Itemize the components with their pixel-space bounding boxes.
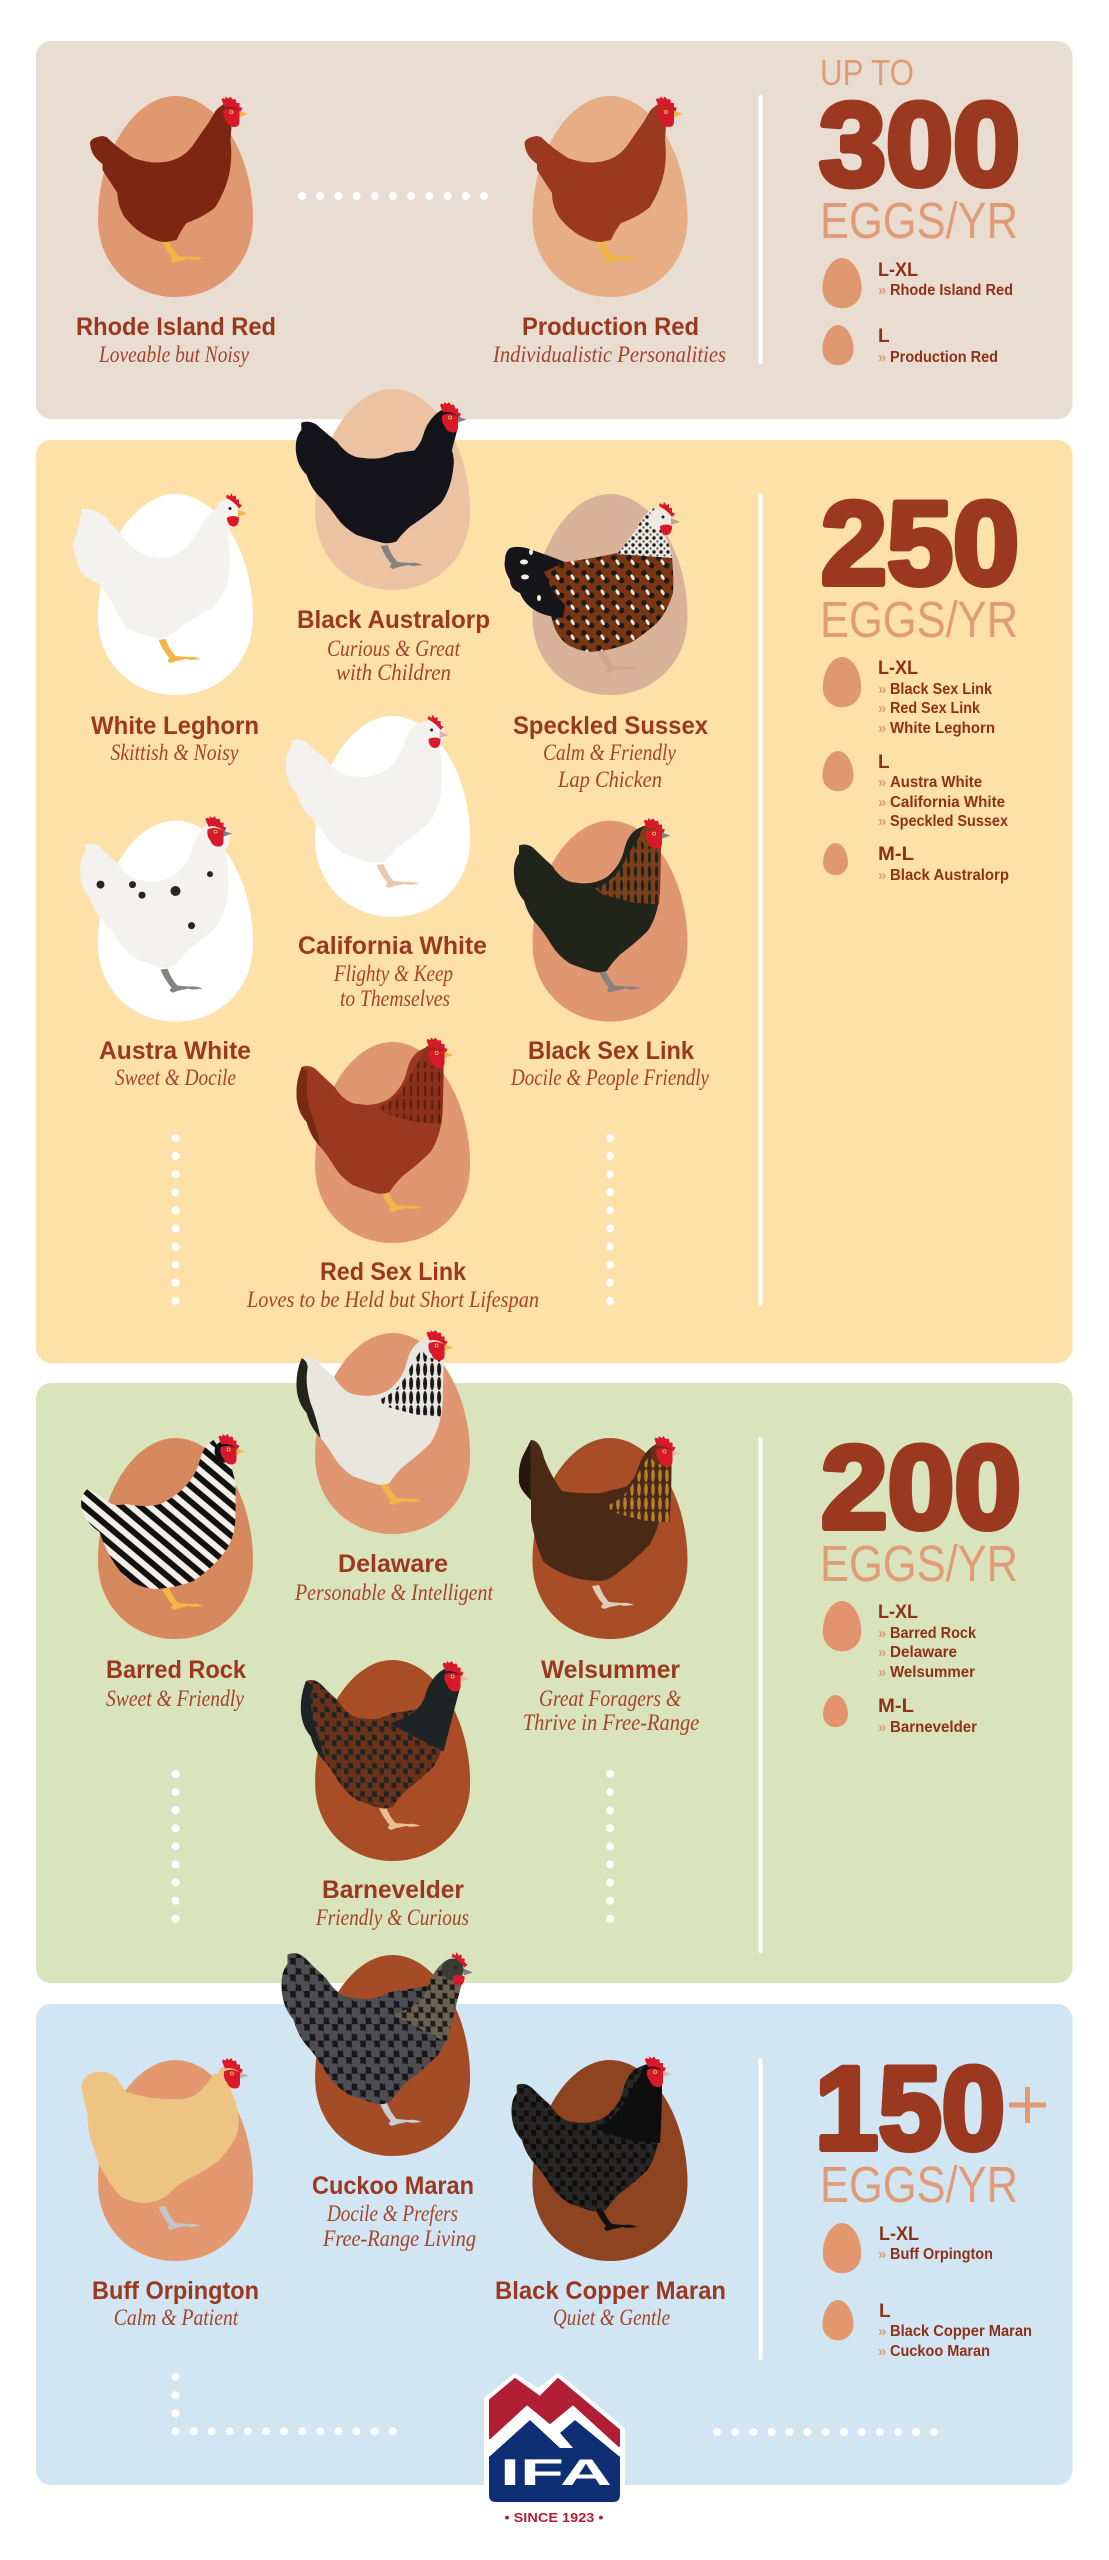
logo: IFA since 1923: • SINCE 1923 • <box>504 2510 604 2525</box>
panel: 250 eggs per year <box>36 389 1072 1363</box>
legend: egg sizes: » <box>878 349 886 366</box>
trait <box>543 740 677 792</box>
trait <box>523 1686 699 1735</box>
trait: Individualistic Personalities <box>492 342 726 367</box>
trait: Calm & Patient <box>114 2305 239 2330</box>
legend: egg sizes: » <box>878 1625 886 1642</box>
trait: Sweet & Docile <box>115 1065 236 1090</box>
trait: Friendly & Curious <box>315 1905 469 1930</box>
legend: egg sizes: » <box>878 1664 886 1681</box>
legend: egg sizes: M-L <box>878 1696 914 1717</box>
legend: egg sizes: » <box>878 813 886 830</box>
legend: egg sizes: Welsummer <box>890 1664 975 1681</box>
legend: egg sizes: L <box>878 752 890 773</box>
egg count: 200: 200 <box>821 1422 1021 1554</box>
breed: California White <box>286 714 487 1011</box>
name: Barred Rock <box>106 1656 246 1684</box>
legend: egg sizes: M-L <box>878 844 914 865</box>
legend: egg sizes: » <box>878 700 886 717</box>
name: Black Copper Maran <box>495 2277 726 2305</box>
legend: egg sizes: California White <box>890 794 1005 811</box>
hen on egg: Production Red <box>524 96 688 297</box>
hen on egg: Black Copper Maran <box>512 2056 688 2261</box>
breed: Barnevelder <box>301 1660 470 1930</box>
legend: egg sizes: Delaware <box>890 1644 957 1661</box>
name: Black Sex Link <box>528 1037 694 1065</box>
dotted connector right <box>606 1774 614 1920</box>
breed: Black Copper Maran <box>495 2056 726 2330</box>
egg count: 150+ <box>815 2043 1046 2213</box>
legend: egg sizes: » <box>878 2343 886 2360</box>
logo: IFA since 1923: IFA <box>500 2452 612 2493</box>
name: Barnevelder <box>322 1876 464 1904</box>
legend: egg sizes: Barred Rock <box>890 1625 976 1642</box>
breed: Black Sex Link <box>510 818 710 1090</box>
dotted connector left <box>172 1774 180 1920</box>
legend: egg sizes: Black Copper Maran <box>890 2323 1032 2340</box>
legend: egg sizes: L <box>878 326 890 347</box>
legend: egg sizes: Black Australorp <box>890 867 1009 884</box>
egg count: up to 300: UP TO <box>820 52 914 93</box>
trait <box>322 2201 476 2251</box>
hen on egg: Speckled Sussex <box>505 494 688 695</box>
name: California White <box>298 932 487 960</box>
legend: egg sizes: Barnevelder <box>890 1719 977 1736</box>
legend: egg sizes <box>822 258 1013 366</box>
hen on egg: Buff Orpington <box>82 2058 253 2261</box>
breed: White Leghorn <box>72 493 259 765</box>
hen on egg: Welsummer <box>519 1436 688 1639</box>
name: Black Australorp <box>297 606 490 634</box>
hen on egg: Austra White <box>80 816 253 1022</box>
dotted connector left <box>172 1138 180 1302</box>
legend: egg sizes: Red Sex Link <box>890 700 980 717</box>
name: Rhode Island Red <box>76 313 276 341</box>
trait: Thrive in Free-Range <box>523 1710 699 1735</box>
trait: Personable & Intelligent <box>294 1580 494 1605</box>
name: Cuckoo Maran <box>312 2172 474 2200</box>
legend: egg sizes <box>822 657 1009 884</box>
name: Production Red <box>522 313 699 341</box>
name: Welsummer <box>541 1656 680 1684</box>
legend: egg sizes: White Leghorn <box>890 720 995 737</box>
egg count: up to 300: EGGS/YR <box>820 192 1018 249</box>
legend: egg sizes: Black Sex Link <box>890 681 992 698</box>
dotted connector left <box>176 2377 393 2431</box>
trait: Docile & Prefers <box>326 2201 458 2226</box>
legend: egg sizes: » <box>878 681 886 698</box>
trait: Sweet & Friendly <box>106 1686 245 1711</box>
legend: egg sizes: » <box>878 794 886 811</box>
legend: egg sizes: L <box>879 2301 891 2322</box>
trait: Skittish & Noisy <box>110 740 239 765</box>
dotted connector right <box>717 2428 935 2436</box>
trait: Free-Range Living <box>322 2226 476 2251</box>
trait: Curious & Great <box>327 636 461 661</box>
trait: to Themselves <box>340 986 450 1011</box>
legend: egg sizes: Austra White <box>890 774 982 791</box>
trait: Loves to be Held but Short Lifespan <box>246 1287 539 1312</box>
hen on egg: Rhode Island Red <box>90 96 253 297</box>
hen on egg: Barnevelder <box>301 1660 470 1861</box>
name: White Leghorn <box>91 712 259 740</box>
name: Speckled Sussex <box>513 712 708 740</box>
legend: egg sizes: Cuckoo Maran <box>890 2343 990 2360</box>
name: Delaware <box>338 1550 448 1578</box>
legend: egg sizes: Production Red <box>890 349 998 366</box>
egg count: 150+: EGGS/YR <box>820 2156 1018 2213</box>
legend: egg sizes: L-XL <box>879 2224 919 2245</box>
legend: egg sizes: » <box>878 1719 886 1736</box>
legend: egg sizes: Speckled Sussex <box>890 813 1008 830</box>
name: Buff Orpington <box>92 2277 259 2305</box>
legend: egg sizes: » <box>878 1644 886 1661</box>
legend: egg sizes: » <box>878 867 886 884</box>
hen on egg: Red Sex Link <box>296 1038 470 1243</box>
egg count: 150+: 150 <box>815 2043 1005 2175</box>
panel: 150+ eggs per year <box>36 1952 1072 2485</box>
egg count: 200: EGGS/YR <box>820 1535 1018 1592</box>
legend: egg sizes: » <box>878 774 886 791</box>
name: Austra White <box>99 1037 251 1065</box>
logo: IFA since 1923 <box>484 2373 625 2525</box>
breed: Welsummer <box>519 1436 699 1735</box>
egg count: up to 300 <box>819 52 1020 249</box>
name: Red Sex Link <box>320 1258 466 1286</box>
hen on egg: White Leghorn <box>72 493 253 695</box>
hen on egg: Barred Rock <box>81 1434 253 1639</box>
breed: Delaware <box>294 1330 494 1605</box>
panel: 200 eggs per year <box>36 1330 1072 1983</box>
trait <box>327 636 461 685</box>
legend: egg sizes: » <box>878 2323 886 2340</box>
breed: Barred Rock <box>81 1434 253 1711</box>
breed: Speckled Sussex <box>505 494 708 792</box>
legend: egg sizes: » <box>878 720 886 737</box>
trait: with Children <box>336 660 451 685</box>
breed: Red Sex Link <box>246 1038 539 1312</box>
dotted connector <box>302 192 486 200</box>
breed: Buff Orpington <box>82 2058 259 2330</box>
egg count: 250: 250 <box>821 478 1019 610</box>
legend: egg sizes <box>822 2223 1032 2360</box>
legend: egg sizes: L-XL <box>878 1602 918 1623</box>
hen on egg: Delaware <box>296 1330 470 1534</box>
egg count: 250: EGGS/YR <box>820 591 1018 648</box>
hen on egg: Black Sex Link <box>514 818 688 1022</box>
breed: Rhode Island Red <box>76 96 276 367</box>
trait: Great Foragers & <box>539 1686 681 1711</box>
hen on egg: Black Australorp <box>296 389 470 590</box>
breed: Black Australorp <box>296 389 490 685</box>
trait: Docile & People Friendly <box>510 1065 710 1090</box>
legend: egg sizes <box>823 1601 977 1736</box>
legend: egg sizes: » <box>878 2246 886 2263</box>
breed: Austra White <box>80 816 253 1090</box>
legend: egg sizes: L-XL <box>878 658 918 679</box>
legend: egg sizes: » <box>878 282 886 299</box>
panel: up to 300 eggs per year <box>36 41 1072 419</box>
trait: Loveable but Noisy <box>98 342 250 367</box>
legend: egg sizes: Rhode Island Red <box>890 282 1013 299</box>
trait: Quiet & Gentle <box>553 2305 670 2330</box>
hen on egg: California White <box>286 714 470 917</box>
breed: Cuckoo Maran <box>282 1952 476 2251</box>
legend: egg sizes: Buff Orpington <box>890 2246 993 2263</box>
trait: Lap Chicken <box>557 767 662 792</box>
trait <box>333 961 453 1011</box>
hen on egg: Cuckoo Maran <box>282 1952 473 2156</box>
dotted connector right <box>606 1138 614 1302</box>
legend: egg sizes: L-XL <box>878 260 918 281</box>
trait: Calm & Friendly <box>543 740 677 765</box>
trait: Flighty & Keep <box>333 961 453 986</box>
breed: Production Red <box>492 96 726 367</box>
egg count: up to 300: 300 <box>819 79 1020 211</box>
